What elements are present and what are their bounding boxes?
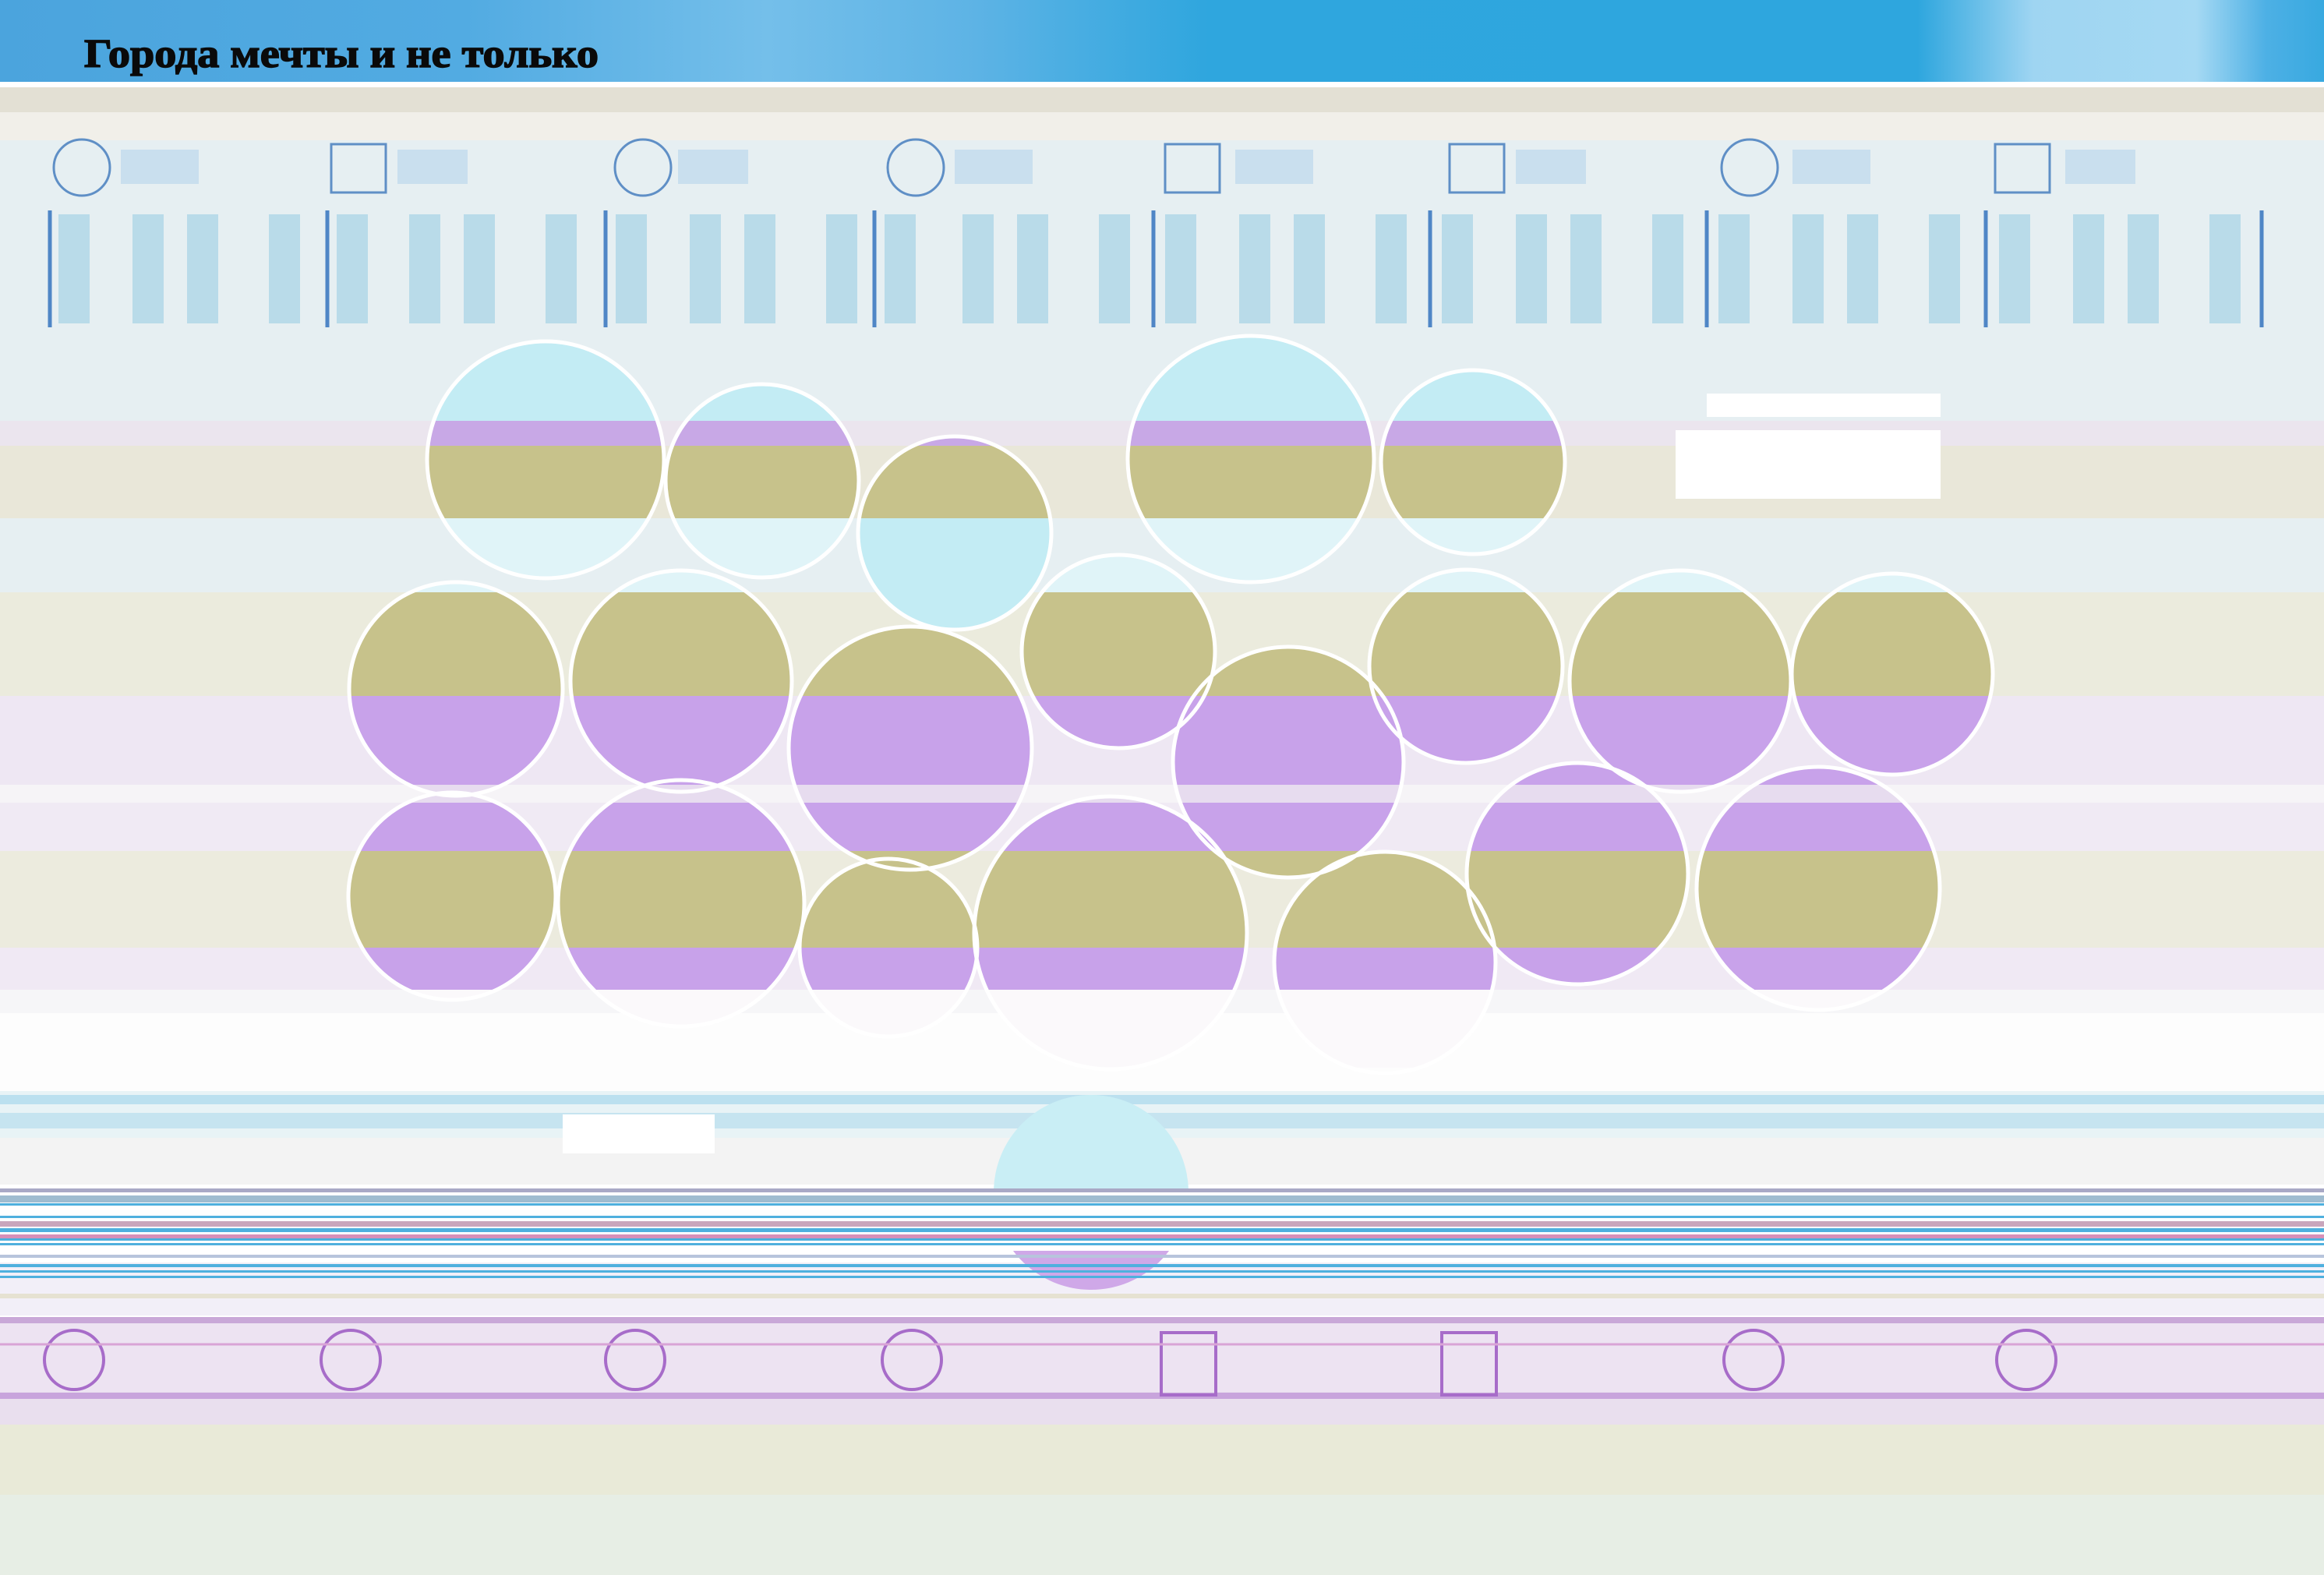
chart: large circle in lower section <box>990 1091 1192 1294</box>
header: sky banner <box>0 0 2324 82</box>
chart: city bubble clusters <box>346 334 1995 1013</box>
section strip: lower header band <box>0 1095 2324 1153</box>
title: Города мечты и не только <box>84 32 599 76</box>
panel: lower icon row of eight items <box>0 1330 2324 1395</box>
panel: eight column headers with icons <box>54 139 2135 196</box>
legend box <box>1676 394 1941 499</box>
stripes: blue band lines <box>0 1188 2324 1399</box>
panel: eight rating table columns <box>50 210 2262 327</box>
